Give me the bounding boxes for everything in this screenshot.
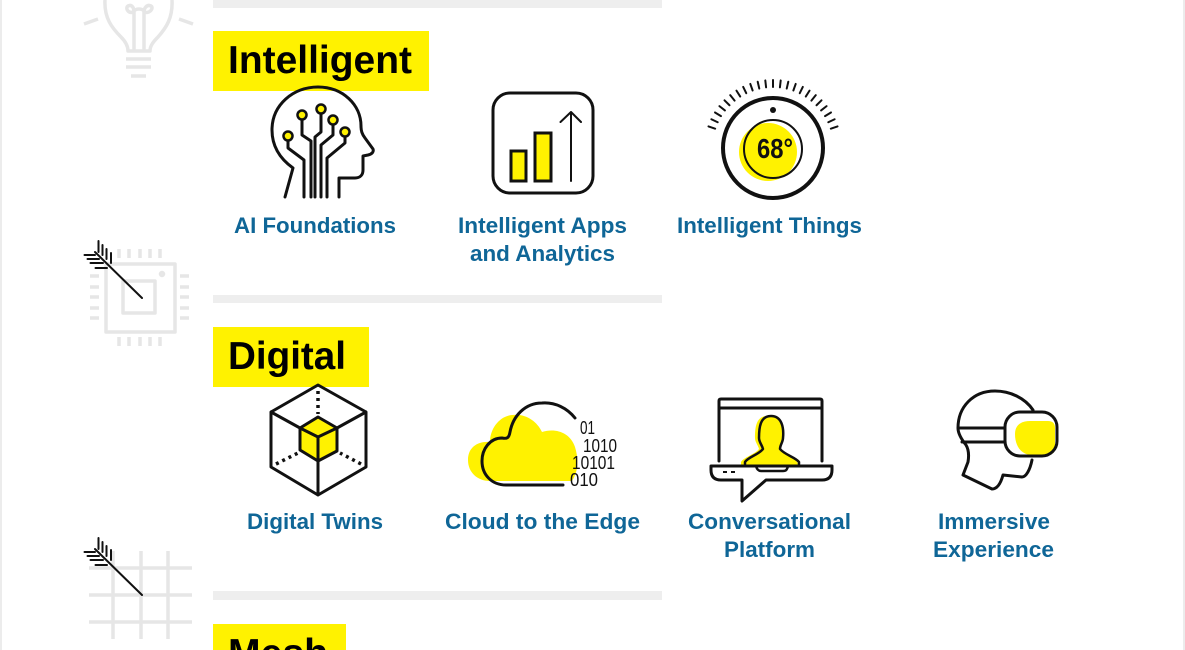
label: Conversational Platform: Platform bbox=[724, 537, 815, 562]
label: Immersive Experience bbox=[933, 509, 1054, 562]
icon: thermostat 68 degrees bbox=[709, 80, 837, 198]
icon: cloud with binary digits: 010 bbox=[570, 470, 598, 490]
icon: cloud with binary digits: 10101 bbox=[572, 453, 615, 473]
label: Conversational Platform bbox=[688, 509, 851, 562]
label: Intelligent Apps and Analytics: and Analytics bbox=[470, 241, 615, 266]
heading: Intelligent: Intelligent bbox=[228, 39, 412, 82]
icon: AI head with circuits bbox=[272, 87, 373, 197]
icon: cloud with binary digits bbox=[468, 403, 617, 490]
heading: Digital: Digital bbox=[228, 335, 346, 378]
label: Intelligent Apps and Analytics bbox=[458, 213, 627, 266]
icon: mesh grid with arrow (faded) bbox=[84, 538, 192, 639]
label: Intelligent Things: Intelligent Things bbox=[677, 213, 862, 238]
icon: microchip with arrow (faded) bbox=[84, 241, 189, 346]
icon: VR headset bbox=[958, 391, 1057, 489]
heading: Intelligent bbox=[213, 31, 429, 91]
icon: thermostat 68 degrees: 68° bbox=[757, 133, 793, 164]
label: Immersive Experience: Immersive bbox=[938, 509, 1050, 534]
label: Digital Twins: Digital Twins bbox=[247, 509, 383, 534]
icon: cloud with binary digits: 1010 bbox=[583, 436, 617, 456]
icon: bar chart with arrow bbox=[493, 93, 593, 193]
label: Cloud to the Edge: Cloud to the Edge bbox=[445, 509, 640, 534]
icon: laptop conversational platform bbox=[711, 399, 832, 501]
label: Immersive Experience: Experience bbox=[933, 537, 1054, 562]
icon: digital twin cube bbox=[271, 385, 366, 495]
label: Conversational Platform: Conversational bbox=[688, 509, 851, 534]
heading: Mesh bbox=[213, 624, 346, 650]
icon: light bulb (faded) bbox=[84, 0, 193, 76]
label: Intelligent Apps and Analytics: Intelligent Apps bbox=[458, 213, 627, 238]
icon: cloud with binary digits: 01 bbox=[580, 418, 595, 438]
heading: Digital bbox=[213, 327, 369, 387]
label: AI Foundations: AI Foundations bbox=[234, 213, 396, 238]
